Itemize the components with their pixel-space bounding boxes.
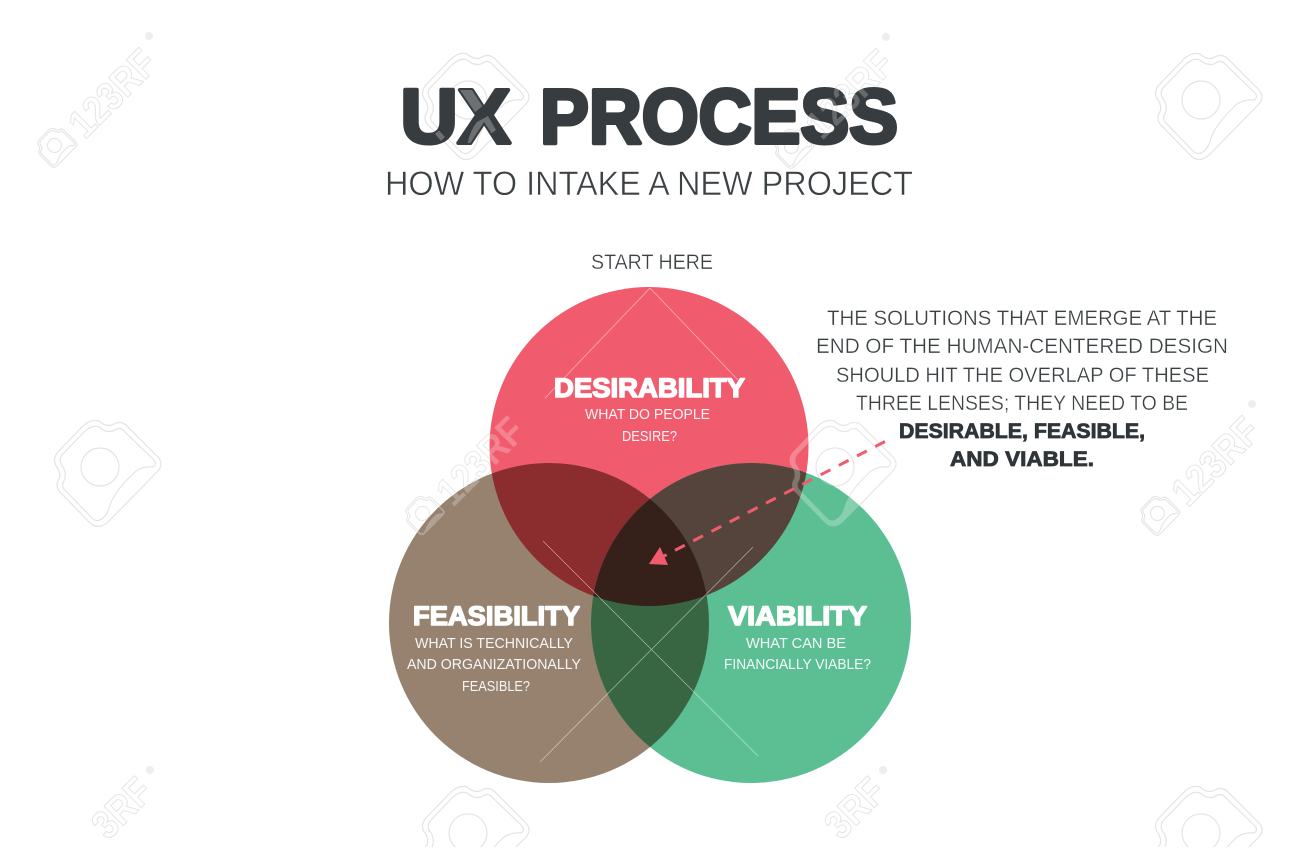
feasibility label: FEASIBLE? xyxy=(462,678,530,695)
watermark tint: logo text over circles: 123RF xyxy=(428,409,534,514)
viability label: WHAT CAN BE xyxy=(746,635,846,652)
watermark: logo right: 123RF xyxy=(1163,409,1269,514)
watermark: egg top right xyxy=(1156,53,1262,160)
watermark: logo right xyxy=(1141,400,1269,535)
explanatory callout: END OF THE HUMAN-CENTERED DESIGN xyxy=(816,335,1228,358)
desirability label: DESIRABILITY xyxy=(554,373,745,403)
explanatory callout: SHOULD HIT THE OVERLAP OF THESE xyxy=(836,364,1209,387)
watermark: logo top centre xyxy=(775,33,903,168)
watermark: logo top left xyxy=(38,32,166,167)
viability label: VIABILITY xyxy=(728,601,867,631)
desirability label: WHAT DO PEOPLE xyxy=(585,406,710,423)
circle: feasibility xyxy=(389,463,709,783)
explanatory callout: DESIRABLE, FEASIBLE, xyxy=(899,420,1145,443)
watermark: logo bottom left: 3RF xyxy=(83,770,161,847)
explanatory callout: AND VIABLE. xyxy=(950,448,1094,471)
watermark tint: egg over circles xyxy=(790,420,896,527)
feasibility label: FEASIBILITY xyxy=(413,601,580,631)
feasibility label: AND ORGANIZATIONALLY xyxy=(407,656,581,673)
watermark: egg middle xyxy=(790,420,896,527)
feasibility label xyxy=(407,601,581,695)
overlap: all three lenses xyxy=(593,499,706,606)
viability label: FINANCIALLY VIABLE? xyxy=(724,656,871,673)
viability label xyxy=(724,601,871,673)
watermark: egg bottom centre xyxy=(422,786,529,847)
watermark: egg bottom right xyxy=(1156,786,1262,847)
circle: viability xyxy=(591,463,911,783)
watermark: logo middle xyxy=(406,400,534,535)
arrow: callout to centre overlap xyxy=(649,442,885,565)
watermark tint: small egg over circles xyxy=(406,496,445,535)
explanatory callout: THREE LENSES; THEY NEED TO BE xyxy=(856,392,1188,415)
title watermark tint xyxy=(435,90,496,143)
title xyxy=(400,74,898,160)
circle: desirability xyxy=(490,287,808,606)
overlap: desirability and viability xyxy=(602,463,806,596)
overlap: desirability and feasibility xyxy=(492,463,650,596)
thin crossing lines xyxy=(540,288,758,762)
explanatory callout: THE SOLUTIONS THAT EMERGE AT THE xyxy=(827,307,1217,330)
overlap: feasibility and viability xyxy=(591,499,709,747)
feasibility label: WHAT IS TECHNICALLY xyxy=(415,635,573,652)
watermark: egg left xyxy=(54,420,161,527)
watermark: logo middle: 123RF xyxy=(428,409,534,514)
title: PROCESS xyxy=(540,74,898,160)
start here label: START HERE xyxy=(591,251,713,274)
title: UX xyxy=(400,74,510,160)
desirability label: DESIRE? xyxy=(622,428,677,445)
watermark: logo top left: 123RF xyxy=(60,41,166,146)
explanatory callout xyxy=(816,307,1228,471)
subtitle: HOW TO INTAKE A NEW PROJECT xyxy=(385,165,913,203)
watermark: egg top centre xyxy=(422,53,529,160)
watermark: logo top centre: 123RF xyxy=(797,42,903,147)
desirability label xyxy=(554,373,745,445)
watermark: logo bottom centre: 3RF xyxy=(816,770,894,847)
venn diagram xyxy=(389,287,911,783)
watermarks over the circles xyxy=(406,42,903,535)
watermark tint: logo text over title: 123RF xyxy=(797,42,903,147)
